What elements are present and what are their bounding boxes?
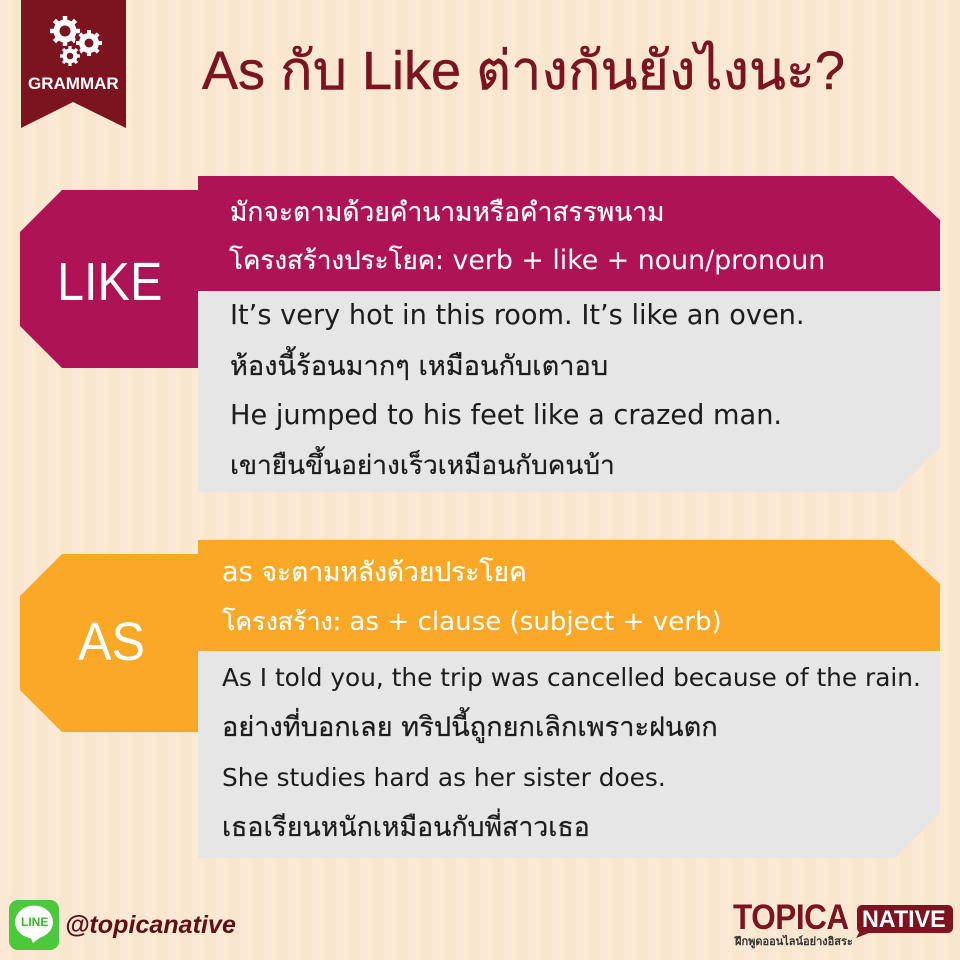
line icon label: LINE (21, 915, 48, 929)
icon: line app (9, 900, 59, 950)
as rule line 2: โครงสร้าง: as + clause (subject + verb) (222, 606, 722, 636)
as rule line 1: as จะตามหลังด้วยประโยค (222, 556, 527, 588)
as rule text (222, 556, 722, 636)
ribbon: grammar (21, 0, 126, 128)
like rule line 2: โครงสร้างประโยค: verb + like + noun/pronoun (229, 244, 825, 276)
as example 2: She studies hard as her sister does. (222, 762, 666, 792)
as example 1: As I told you, the trip was cancelled because of the rain. (222, 662, 921, 692)
logo tagline: ฝึกพูดออนไลน์อย่างอิสระ (735, 936, 853, 948)
ribbon label: GRAMMAR (28, 74, 119, 93)
title: As กับ Like ต่างกันยังไงนะ? (202, 41, 845, 101)
like badge label: LIKE (57, 252, 162, 312)
panel: like header (198, 176, 940, 291)
as translation 1: อย่างที่บอกเลย ทริปนี้ถูกยกเลิกเพราะฝนตก (222, 712, 718, 742)
logo: topica: TOPICA (733, 898, 849, 937)
like rule text (229, 196, 825, 276)
icon: gears (50, 16, 103, 67)
line handle: @topicanative (65, 911, 236, 939)
badge: like (20, 190, 198, 368)
like examples text (230, 300, 805, 480)
logo: native: NATIVE (862, 906, 946, 933)
as badge label: AS (78, 612, 145, 672)
panel: as examples (198, 651, 940, 858)
as translation 2: เธอเรียนหนักเหมือนกับพี่สาวเธอ (222, 812, 590, 842)
panel: like examples (198, 291, 940, 492)
badge: as (20, 554, 198, 732)
panel: as header (198, 540, 940, 651)
logo: native speech box (856, 905, 953, 938)
as examples text (222, 662, 921, 842)
like translation 2: เขายืนขึ้นอย่างเร็วเหมือนกับคนบ้า (230, 450, 615, 480)
like example 2: He jumped to his feet like a crazed man. (230, 400, 782, 430)
like translation 1: ห้องนี้ร้อนมากๆ เหมือนกับเตาอบ (230, 350, 608, 382)
like example 1: It’s very hot in this room. It’s like an oven. (230, 300, 805, 330)
like rule line 1: มักจะตามด้วยคำนามหรือคำสรรพนาม (230, 196, 665, 228)
